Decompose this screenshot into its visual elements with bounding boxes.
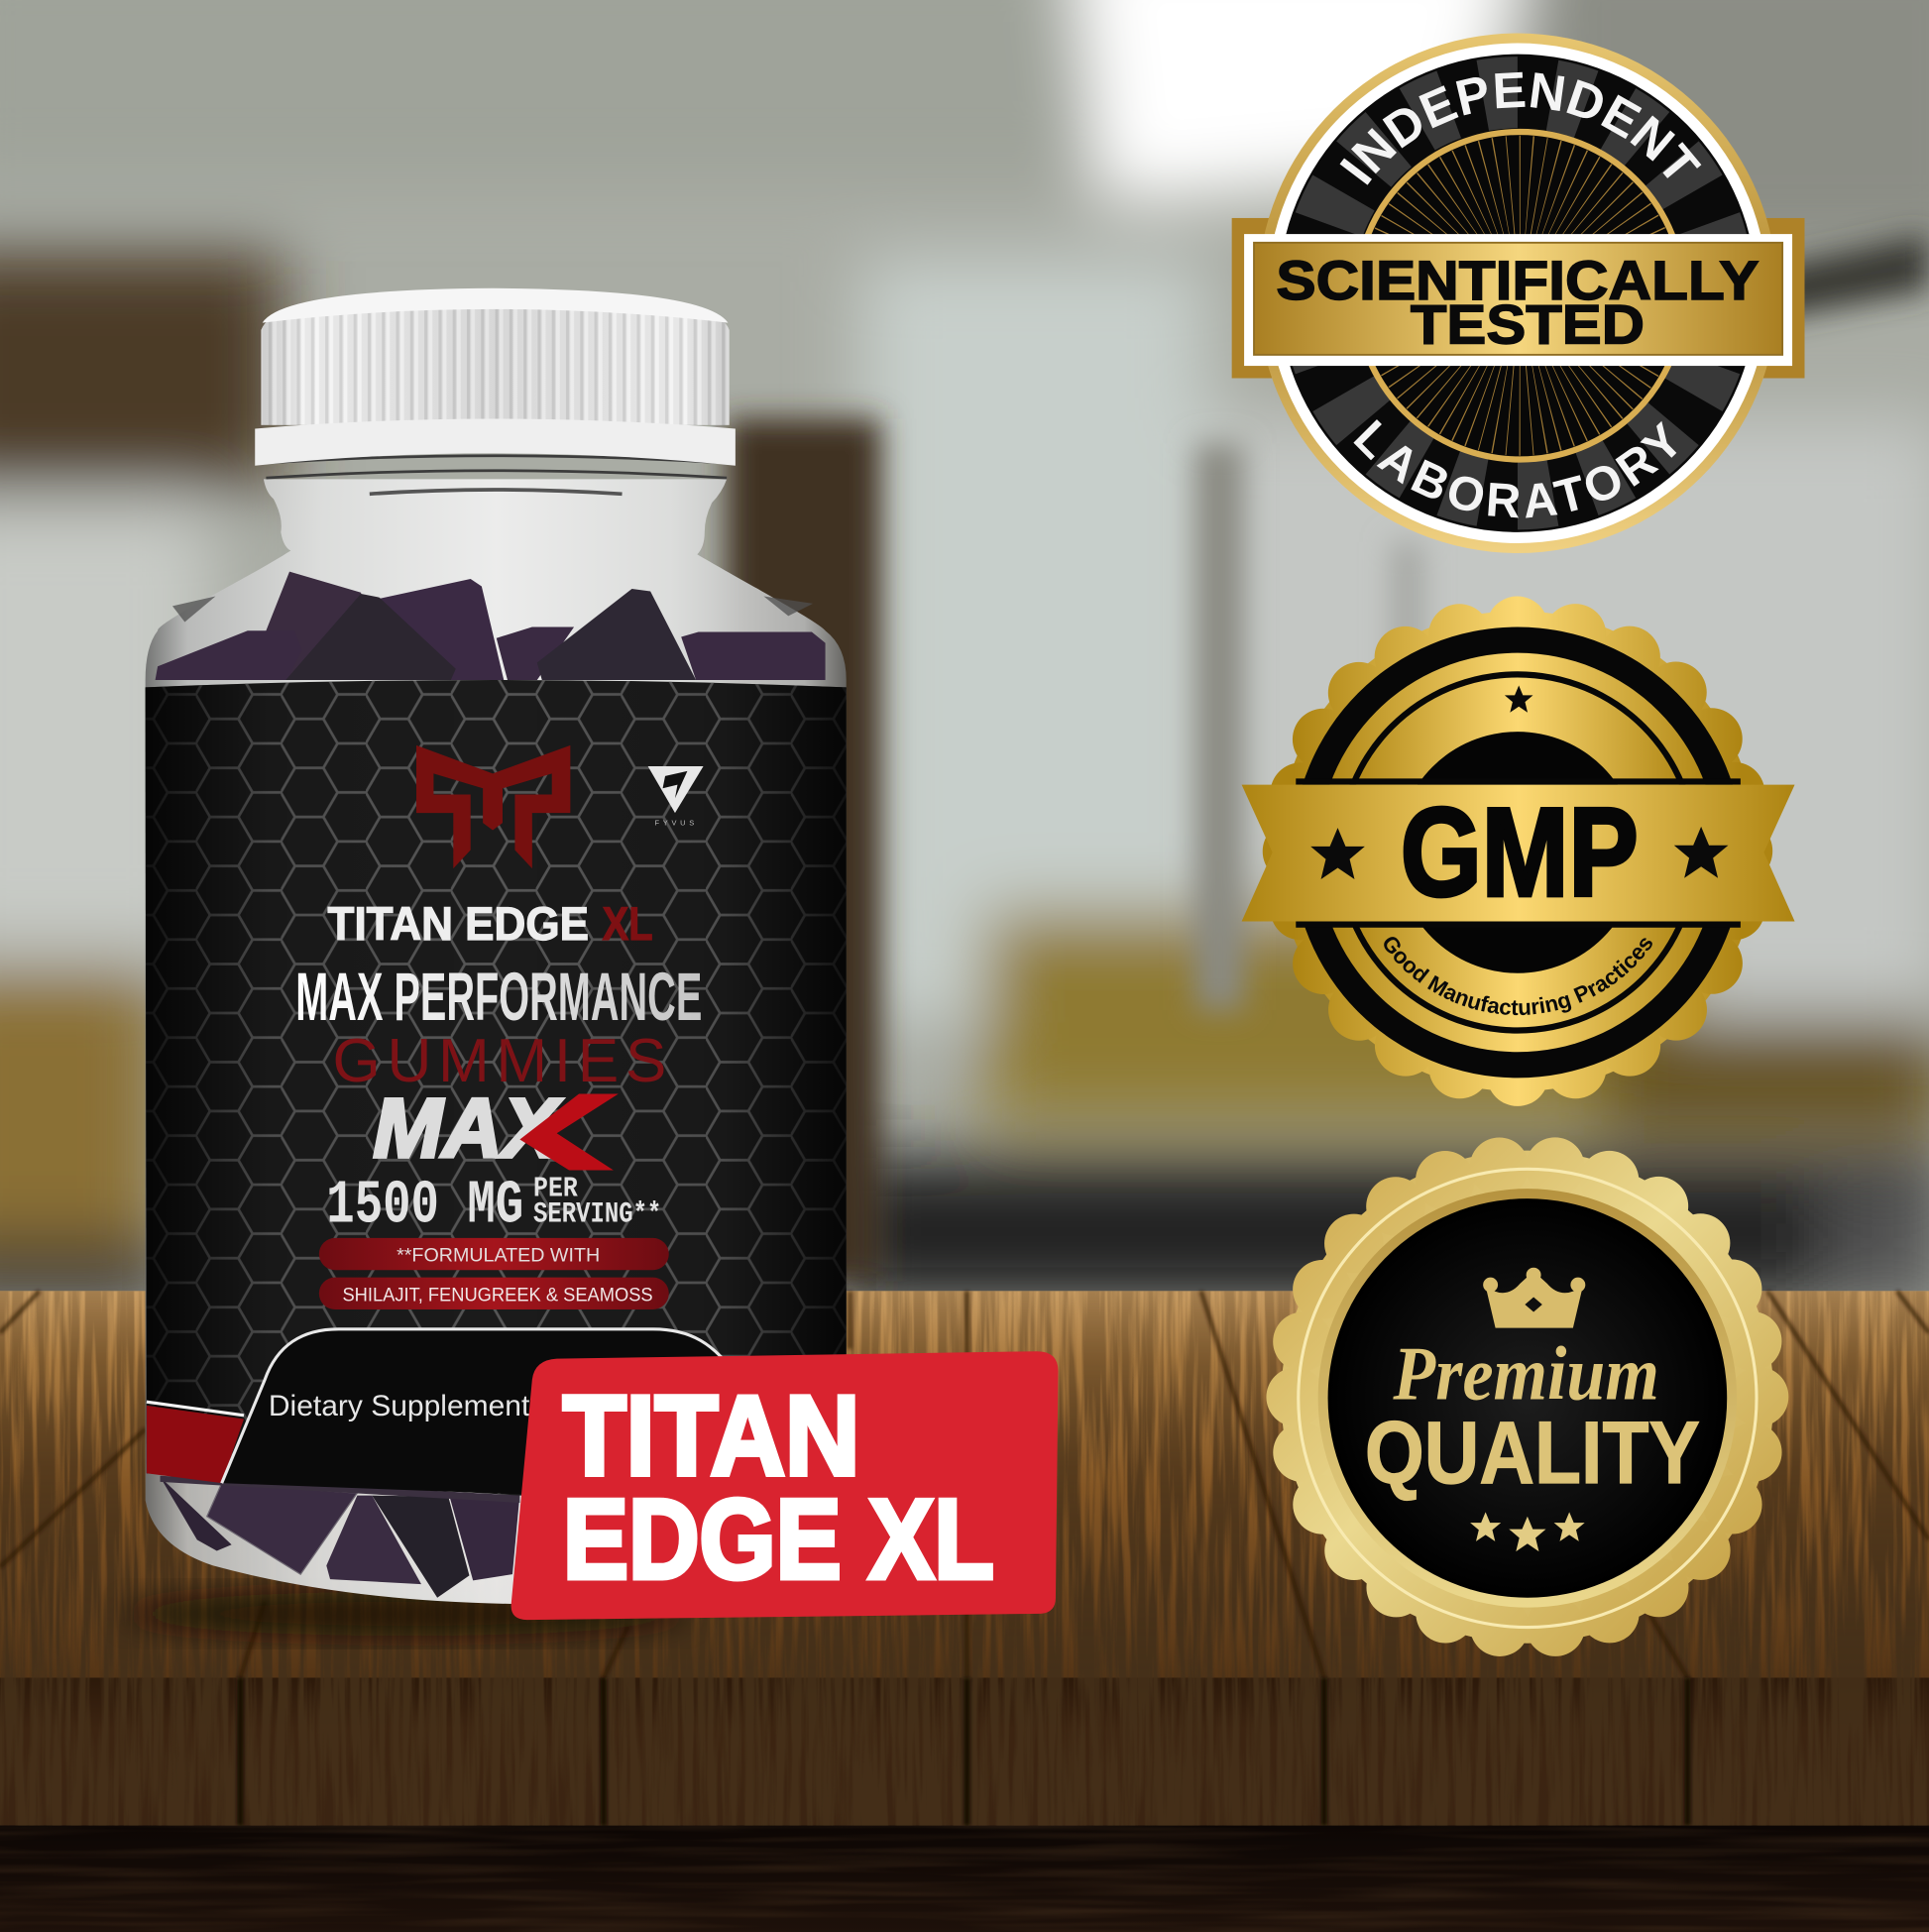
- formulated pill: **FORMULATED WITH: [397, 1245, 600, 1266]
- red name tag: TITAN: [563, 1373, 859, 1499]
- product bottle: [146, 288, 847, 1604]
- crown: [1483, 1268, 1585, 1328]
- badge: scientifically tested: SCIENTIFICALLY: [1276, 249, 1759, 311]
- quality: QUALITY: [1365, 1403, 1700, 1502]
- wooden table: [0, 1291, 1929, 1932]
- ribbon back: [1232, 218, 1804, 378]
- product name: XL: [603, 898, 653, 951]
- red stripe: [147, 1402, 244, 1483]
- FYVUS logo: [648, 766, 704, 828]
- center sunburst: [1374, 135, 1665, 456]
- badge: scientifically tested: TESTED: [1411, 293, 1645, 356]
- table underside: [0, 1826, 1929, 1932]
- blurred room background: [0, 0, 1929, 1306]
- neck ridges: [264, 456, 730, 494]
- white screw cap: [255, 288, 736, 466]
- arc text independent: INDEPENDENT: [1340, 71, 1701, 185]
- banner: [1242, 785, 1795, 922]
- ribbon: [1244, 234, 1792, 366]
- badge: GMP: [1241, 597, 1794, 1106]
- glass reflections: [172, 596, 813, 623]
- red name tag: EDGE XL: [563, 1477, 994, 1603]
- bottle shadow: [123, 1592, 690, 1636]
- gummies lower: [161, 1476, 519, 1598]
- gummies upper: [156, 572, 826, 680]
- badge: scientifically tested: [1231, 34, 1804, 553]
- three stars: [1470, 1512, 1585, 1551]
- black label: [146, 680, 847, 1496]
- badge: premium quality: [1281, 1151, 1773, 1644]
- banner stars: [1310, 828, 1365, 879]
- MAX logotype: MAX: [374, 1081, 563, 1175]
- arc text: Good Manufacturing Practices: [1384, 937, 1652, 1015]
- glass body: [146, 479, 847, 1604]
- GMP text: GMP: [1401, 781, 1639, 922]
- ingredients pill: SHILAJIT, FENUGREEK & SEAMOSS: [342, 1285, 653, 1306]
- table front edge: [0, 1678, 1929, 1826]
- dosage: SERVING**: [533, 1197, 661, 1231]
- star top: [1505, 686, 1532, 713]
- max performance: MAX PERFORMANCE: [295, 960, 702, 1035]
- product name: TITAN EDGE: [328, 898, 589, 951]
- gummies heading: GUMMIES: [333, 1027, 666, 1095]
- brand logo: [416, 745, 570, 868]
- banner edges: [1296, 778, 1741, 928]
- table top surface: [0, 1291, 1929, 1678]
- arc text laboratory: LABORATORY: [1354, 419, 1677, 517]
- red name tag: [511, 1351, 1059, 1620]
- dosage: PER: [533, 1173, 579, 1205]
- supplement panel: [222, 1329, 739, 1496]
- ingredients pill: [319, 1278, 669, 1309]
- dosage: 1500 MG: [326, 1171, 523, 1241]
- supplement panel: Dietary Supplement: [269, 1390, 530, 1422]
- FYVUS logo: FYVUS: [654, 819, 698, 828]
- formulated pill: [319, 1238, 669, 1270]
- premium script: Premium: [1393, 1331, 1659, 1417]
